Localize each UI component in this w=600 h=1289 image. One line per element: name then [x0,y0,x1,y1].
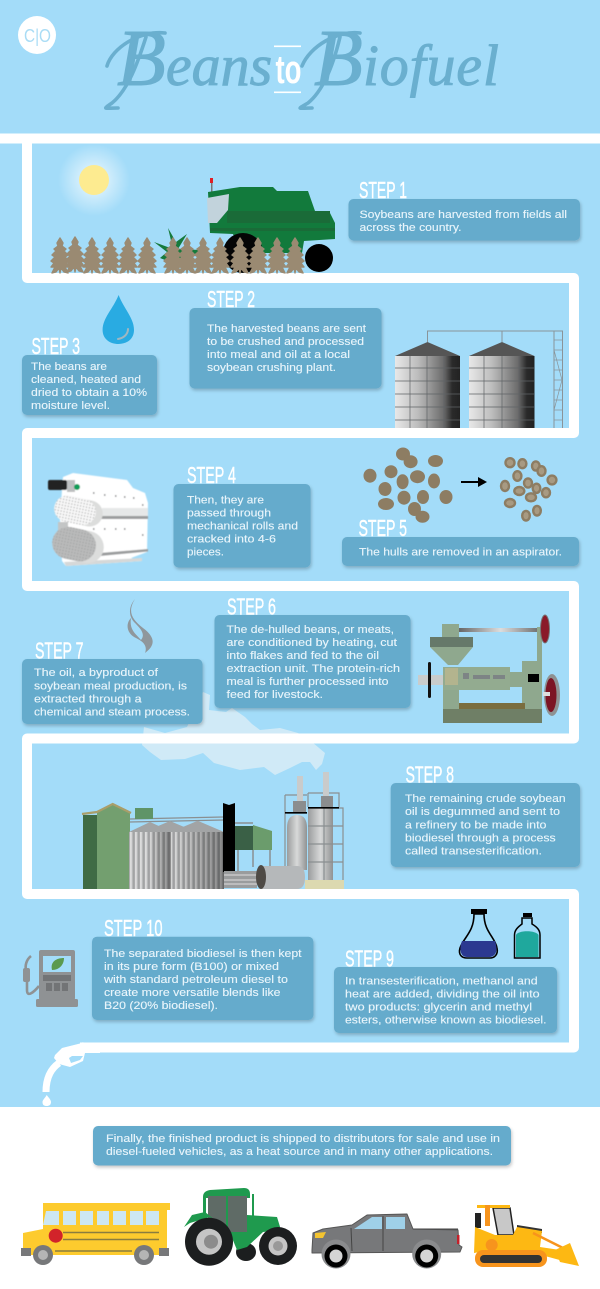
step 6 panel: The de-hulled beans, or meats, [226,624,394,636]
step 9 panel: two products: glycerin and methyl [345,1002,532,1014]
heading: step 10: STEP 10 [104,915,162,941]
icon: water drop [103,295,134,344]
icon: hulled soybeans [501,458,556,520]
step 3 panel: moisture level. [31,400,110,412]
title word: Beans: Beans [117,15,272,103]
step 7 panel [22,638,202,724]
step 1 panel: across the country. [360,222,462,234]
smoke cloud [142,692,325,775]
white flow line [0,138,600,1048]
step 10 panel [92,915,313,1020]
step 5 panel: The hulls are removed in an aspirator. [359,547,562,559]
step 10 panel: B20 (20% biodiesel). [104,1000,218,1012]
logo: C|O badge: C|O [24,26,51,46]
vehicle: pickup truck [312,1214,462,1268]
step 4 panel: mechanical rolls and [187,520,298,532]
vehicle: school bus [21,1203,170,1265]
heading: step 3: STEP 3 [32,333,80,359]
icon: steam wisp [128,599,153,653]
final callout [93,1126,511,1166]
step 6 panel: feed for livestock. [226,689,323,701]
icon: biodiesel refinery [82,772,344,889]
step 6 panel: meal is further processed into [226,676,389,688]
step 4 panel: passed through [187,507,271,519]
step 8 panel: oil is degummed and sent to [405,806,560,818]
heading: step 5: STEP 5 [358,515,407,541]
step 2 panel: into meal and oil at a local [207,349,350,361]
step 1 panel: Soybeans are harvested from fields all [360,209,567,221]
step 2 panel: soybean crushing plant. [207,362,336,374]
heading: step 1: STEP 1 [359,177,407,203]
icon: fuel nozzle and drop [42,1042,100,1106]
arrow: beans to hulled beans [461,477,487,487]
step 6 panel: are conditioned by heating, cut [226,637,397,649]
step 8 panel [391,762,580,867]
icon: cracking rolls machine [48,473,148,566]
step 10 panel: The separated biodiesel is then kept [104,948,302,960]
step 4 panel [174,462,310,568]
title [106,15,500,108]
step 4 panel: Then, they are [187,494,264,506]
icon: whole soybeans [364,448,452,523]
step 8 panel: biodiesel through a process [405,832,556,844]
logo: C|O badge [18,16,56,54]
step 9 panel: In transesterification, methanol and [345,976,538,988]
step 9 panel: esters, otherwise known as biodiesel. [345,1015,546,1027]
step 7 panel: extracted through a [34,693,142,705]
step 6 panel: into flakes and fed to the oil [226,650,379,662]
white footer band [0,1107,600,1289]
heading: step 6: STEP 6 [227,594,276,620]
heading: step 7: STEP 7 [35,638,84,664]
step 2 panel [190,286,382,388]
vehicle: bulldozer [474,1205,579,1267]
heading: step 4: STEP 4 [187,462,236,488]
icon: grain silos [395,331,562,428]
icon: fuel pump [23,950,78,1007]
step 10 panel: in its pure form (B100) or mixed [104,961,279,973]
title word: to: to [276,48,302,92]
step 7 panel: chemical and steam process. [34,706,190,718]
step 9 panel: heat are added, dividing the oil into [345,989,540,1001]
heading: step 9: STEP 9 [345,946,394,972]
step 4 panel: pieces. [187,546,224,558]
step 1 panel [348,177,580,240]
icon: oil press machine [418,615,560,723]
heading: step 2: STEP 2 [207,286,255,312]
step 8 panel: called transesterification. [405,846,542,858]
step 2 panel: The harvested beans are sent [207,323,366,335]
step 6 panel [214,594,410,708]
step 3 panel: cleaned, heated and [31,374,141,386]
step 9 panel [334,946,557,1033]
icon: teal bottle [514,913,540,958]
step 3 panel [22,333,157,415]
title word: Biofuel: Biofuel [314,15,500,103]
step 8 panel: a refinery to be made into [405,820,547,832]
icon: chemical flask [459,909,497,958]
step 3 panel: dried to obtain a 10% [31,387,148,399]
vehicle: green tractor [184,1188,297,1266]
final callout: diesel-fueled vehicles, as a heat source and in many other applications. [106,1146,493,1158]
soybean plants [51,237,304,273]
step 3 panel: The beans are [31,361,107,373]
final callout: Finally, the finished product is shipped to distributors for sale and use in [106,1133,500,1145]
step 8 panel: The remaining crude soybean [405,793,566,805]
step 5 panel [342,515,579,566]
icon: combine harvester [154,178,335,273]
step 10 panel: create more versatile blends like [104,987,281,999]
heading: step 8: STEP 8 [406,762,454,788]
step 7 panel: soybean meal production, is [34,680,187,692]
step 10 panel: with standard petroleum diesel to [103,974,288,986]
title word: to [274,46,302,93]
step 4 panel: cracked into 4-6 [187,534,276,546]
step 6 panel: extraction unit. The protein-rich [226,663,400,675]
step 2 panel: to be crushed and processed [207,336,364,348]
icon: sun [58,144,130,216]
step 7 panel: The oil, a byproduct of [34,667,158,679]
